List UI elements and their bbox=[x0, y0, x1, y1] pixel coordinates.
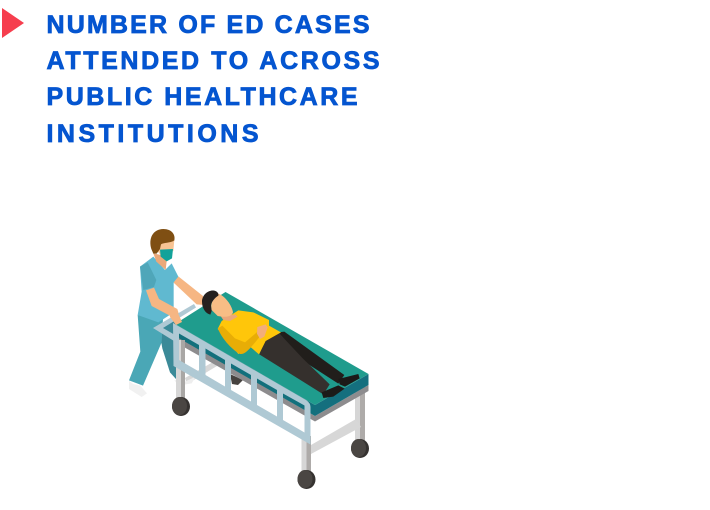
nurse back shoe bbox=[174, 377, 196, 386]
patient far leg bbox=[278, 332, 344, 384]
nurse legs bbox=[129, 315, 196, 397]
near right leg bbox=[302, 436, 311, 472]
patient hand bbox=[257, 324, 268, 339]
nurse back leg bbox=[158, 318, 178, 382]
stretcher far legs and wheels bbox=[185, 362, 369, 458]
nurse torso bbox=[138, 257, 178, 322]
patient bbox=[202, 291, 360, 398]
patient neck bbox=[221, 314, 238, 321]
patient hair bbox=[202, 291, 218, 315]
patient near arm bbox=[218, 326, 263, 354]
nurse face bbox=[157, 240, 174, 256]
mattress underside bbox=[175, 335, 368, 422]
nurse hair bbox=[150, 229, 175, 254]
mattress top bbox=[175, 292, 368, 405]
nurse front shoe bbox=[129, 381, 147, 397]
front wheel bbox=[298, 470, 316, 489]
nurse upper body bbox=[138, 229, 204, 322]
mattress end side bbox=[315, 374, 368, 416]
title: PUBLIC HEALTHCARE bbox=[46, 83, 358, 111]
stretcher bed bbox=[175, 292, 368, 422]
title: NUMBER OF ED CASES bbox=[46, 11, 370, 39]
icon: red triangle marker bbox=[2, 8, 24, 38]
patient torso bbox=[218, 310, 281, 354]
mattress front side bbox=[175, 324, 315, 416]
near left leg bbox=[176, 340, 185, 400]
nurse near hand bbox=[169, 309, 182, 325]
nurse near arm bbox=[146, 288, 180, 318]
nurse sleeve bbox=[140, 262, 156, 290]
patient near foot bbox=[322, 385, 345, 398]
patient near leg bbox=[259, 332, 330, 394]
patient far foot bbox=[338, 374, 360, 387]
nurse front leg bbox=[129, 315, 163, 386]
nurse far arm bbox=[173, 276, 204, 305]
left wheel bbox=[172, 397, 190, 416]
title: INSTITUTIONS bbox=[46, 120, 258, 148]
illustration: nurse pushing patient on stretcher bbox=[129, 229, 369, 489]
title: ATTENDED TO ACROSS bbox=[46, 47, 380, 75]
nurse neck bbox=[153, 253, 167, 270]
side rail bbox=[173, 323, 310, 444]
nurse mask bbox=[160, 249, 173, 261]
title bbox=[46, 11, 380, 148]
patient face bbox=[211, 294, 233, 317]
stretcher near legs, wheels and rail bbox=[153, 304, 316, 489]
push handle bbox=[153, 304, 196, 341]
